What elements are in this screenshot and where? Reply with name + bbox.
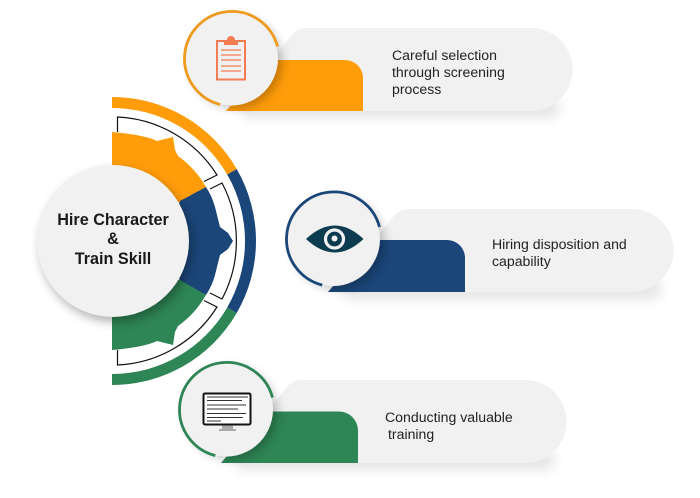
- center title: Train Skill: [75, 250, 151, 268]
- center circle shadow: [40, 170, 192, 322]
- pill background: [220, 380, 566, 463]
- text: hiring disposition: capability: [492, 253, 552, 269]
- item 1: careful selection: [184, 11, 572, 118]
- outer arc: blue: [227, 169, 256, 313]
- text: hiring disposition: Hiring disposition and: [492, 236, 627, 252]
- center title: Hire Character: [57, 211, 169, 229]
- icon circle: [184, 11, 278, 111]
- circle shadow: [292, 197, 384, 289]
- ring: [185, 11, 278, 105]
- icon: clipboard: [217, 36, 245, 80]
- ring: [287, 192, 380, 285]
- item 2: hiring disposition: [286, 192, 674, 299]
- text: careful selection: process: [392, 81, 441, 97]
- colour tab: [226, 60, 363, 111]
- pill shadow: [235, 450, 555, 470]
- pill background: [225, 28, 572, 111]
- circle shadow: [185, 367, 277, 459]
- outline: middle segment: [210, 183, 236, 299]
- pill background: [327, 209, 674, 292]
- gear segment: orange: [112, 132, 206, 202]
- icon badge: [179, 362, 273, 462]
- text: careful selection: through screening: [392, 64, 505, 80]
- ring: [180, 362, 272, 456]
- icon badge: [184, 11, 278, 111]
- center circle: [37, 165, 189, 317]
- circle shadow: [190, 16, 282, 108]
- gear segment: blue: [165, 187, 233, 295]
- icon circle: [286, 192, 380, 292]
- gear segment: green: [112, 280, 206, 350]
- pill shadow: [342, 279, 662, 299]
- diagram: hire character and train skill wheel: [37, 97, 256, 385]
- colour tab: [328, 240, 465, 292]
- item 3: valuable training: [179, 362, 567, 470]
- pill shadow: [240, 98, 560, 118]
- outer arc: green: [112, 308, 237, 385]
- icon badge: [286, 192, 380, 292]
- outline: bottom segment: [118, 300, 217, 365]
- icon: eye: [306, 226, 364, 252]
- text: valuable training: training: [388, 426, 434, 442]
- icon: computer monitor: [204, 394, 250, 431]
- text: careful selection: Careful selection: [392, 47, 497, 63]
- text: valuable training: Conducting valuable: [385, 409, 513, 425]
- colour tab: [221, 412, 358, 463]
- outline: top segment: [118, 117, 217, 182]
- outer arc: orange: [112, 97, 237, 174]
- center title: &: [107, 230, 119, 248]
- icon circle: [179, 362, 273, 462]
